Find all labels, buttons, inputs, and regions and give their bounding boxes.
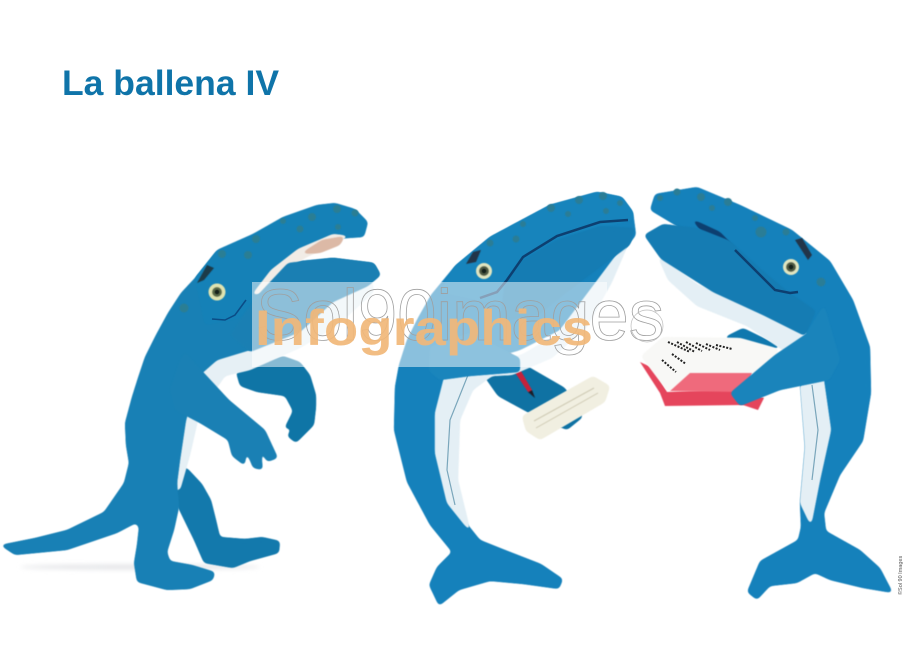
- watermark: Sol90images: Sol90images: [256, 276, 664, 356]
- belly: [435, 238, 631, 533]
- mouth interior: [690, 218, 745, 258]
- mouth line: [212, 300, 246, 320]
- title: La ballena IV: [62, 64, 280, 103]
- mouth line: [480, 220, 628, 298]
- back flipper: [725, 328, 782, 354]
- credit: ©Sol 90 Images: [897, 556, 904, 595]
- back leg: [172, 468, 280, 568]
- lower jaw: [500, 226, 635, 322]
- watermark panel: [252, 282, 607, 367]
- belly grooves: [812, 385, 818, 480]
- book inner red: [670, 373, 752, 392]
- eye: [208, 284, 226, 300]
- eye: [476, 263, 492, 279]
- front arm: [730, 305, 840, 406]
- blowhole scar: [197, 265, 214, 283]
- bumps: [180, 205, 358, 312]
- mouth line: [735, 250, 798, 293]
- paper folds: [534, 388, 598, 428]
- body and tail: [650, 187, 893, 600]
- watermark seal: [631, 310, 663, 342]
- lower jaw: [230, 258, 381, 352]
- book pages: [641, 337, 779, 392]
- blowhole scar: [466, 250, 481, 264]
- upper jaw: [195, 203, 368, 325]
- pencil: [476, 306, 535, 398]
- front arm: [170, 352, 278, 470]
- front flipper: [429, 333, 520, 380]
- watermark: Infographics: Infographics: [255, 300, 593, 356]
- mouth interior: [300, 236, 345, 254]
- holding flipper: [484, 358, 583, 430]
- whale 2: writing with pencil: [394, 192, 636, 606]
- whale 3: reading book: [640, 187, 893, 600]
- back arm: [236, 356, 316, 443]
- baleen: [251, 234, 350, 296]
- whale 1: walking on legs: [0, 203, 381, 590]
- book text lines: [662, 342, 732, 372]
- white chest band: [657, 255, 815, 353]
- belly: [170, 280, 374, 490]
- lower jaw: [644, 224, 816, 336]
- bumps: [486, 192, 623, 246]
- belly: [800, 374, 831, 526]
- upper jaw: [440, 192, 633, 305]
- ground shadow: [20, 564, 260, 570]
- bumps: [657, 188, 826, 286]
- eye: [783, 259, 799, 275]
- body and tail: [394, 192, 636, 606]
- book cover: [640, 362, 764, 410]
- body and tail: [0, 240, 380, 590]
- book: [640, 337, 779, 410]
- blowhole scar: [795, 238, 812, 260]
- belly grooves: [447, 375, 468, 505]
- sheet of paper: [522, 376, 610, 440]
